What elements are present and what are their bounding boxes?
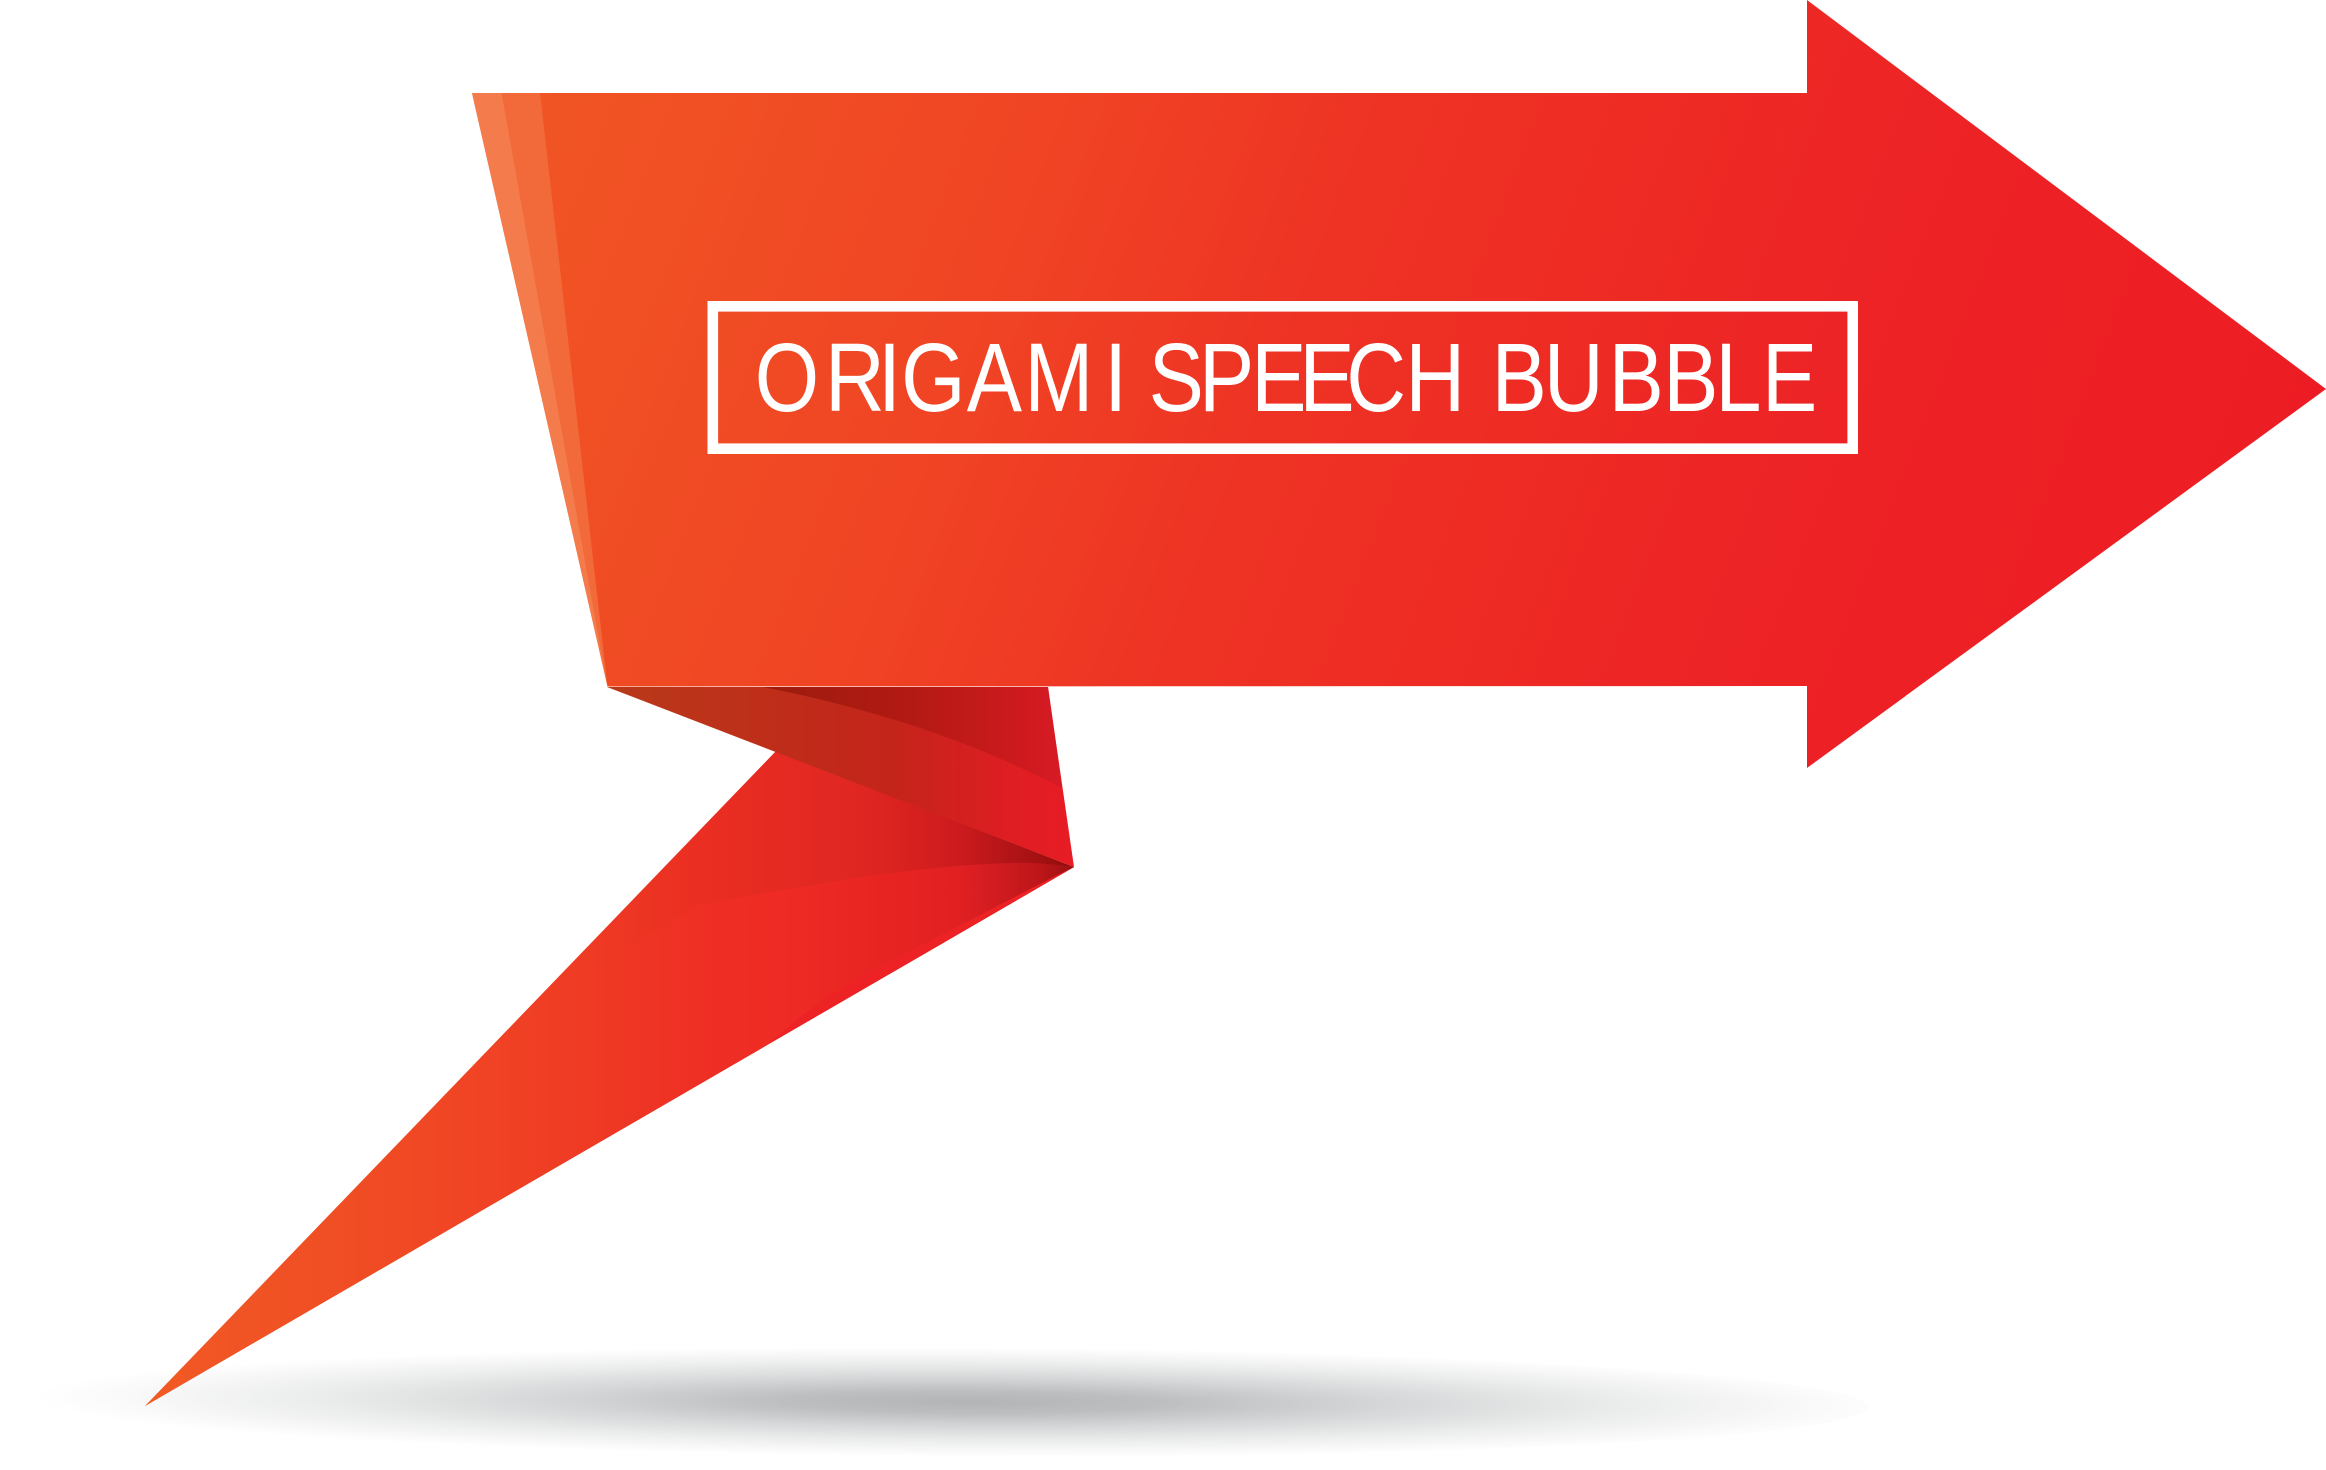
- title text: ORIGAMI SPEECH BUBBLE: [755, 324, 1817, 433]
- ground shadow: [0, 1342, 1868, 1462]
- main arrow: [472, 0, 2326, 768]
- flap edge sliver: [770, 867, 1074, 1043]
- lower folded flap: [145, 751, 1074, 1406]
- flap upper shaded part: [145, 751, 1074, 1406]
- inner fold band: [607, 687, 1074, 867]
- band dark fold: [763, 687, 1062, 788]
- inner light fold: [502, 93, 608, 686]
- title frame: [713, 306, 1853, 449]
- flap lower lit part: [145, 863, 1074, 1406]
- band main: [607, 687, 1074, 867]
- outer light fold: [472, 93, 608, 686]
- left fold highlights: [472, 93, 608, 686]
